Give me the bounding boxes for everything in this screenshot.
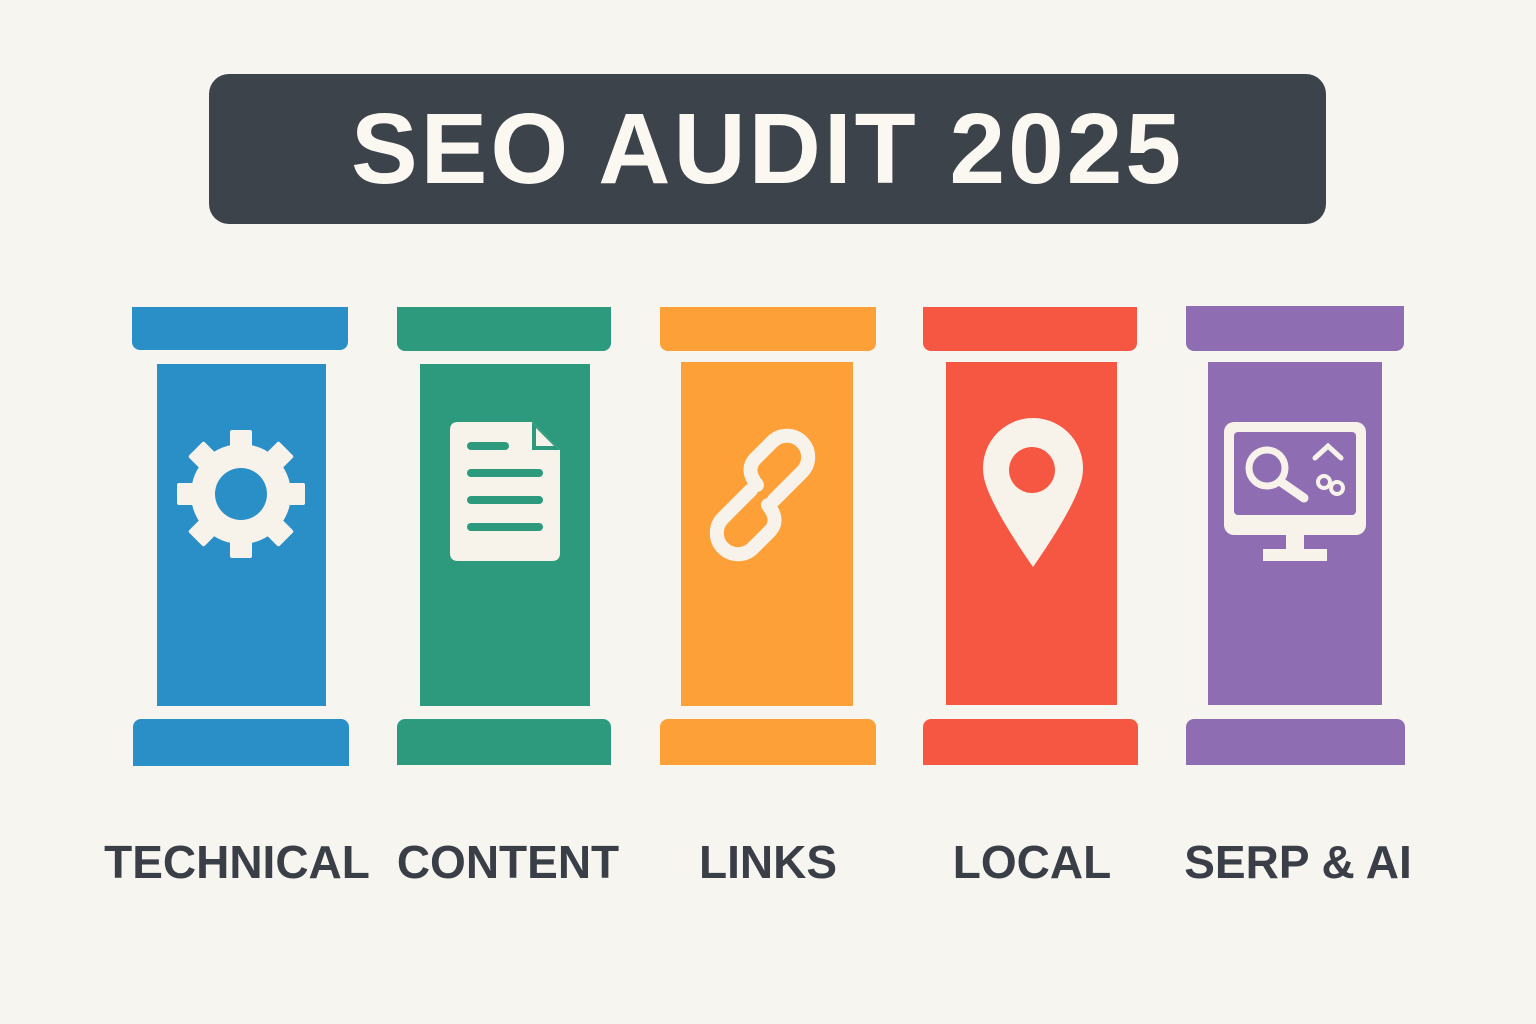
title: [209, 74, 1326, 224]
pillar: links: [660, 307, 876, 765]
pillar: content: [397, 307, 611, 765]
pillar: technical: [132, 307, 349, 766]
label: technical: TECHNICAL: [104, 836, 370, 888]
title: SEO AUDIT 2025: [351, 93, 1184, 205]
icon: map pin: [983, 418, 1083, 567]
icon: gear: [177, 430, 305, 558]
label: serp & ai: SERP & AI: [1184, 836, 1412, 888]
label: links: LINKS: [699, 836, 837, 888]
icon: monitor with search: [1224, 422, 1366, 561]
pillar: serp & ai: [1186, 306, 1405, 765]
label: content: CONTENT: [397, 836, 619, 888]
label: local: LOCAL: [953, 836, 1111, 888]
pillar: local: [923, 307, 1138, 765]
icon: chain link: [717, 436, 808, 554]
icon: document: [450, 422, 560, 561]
